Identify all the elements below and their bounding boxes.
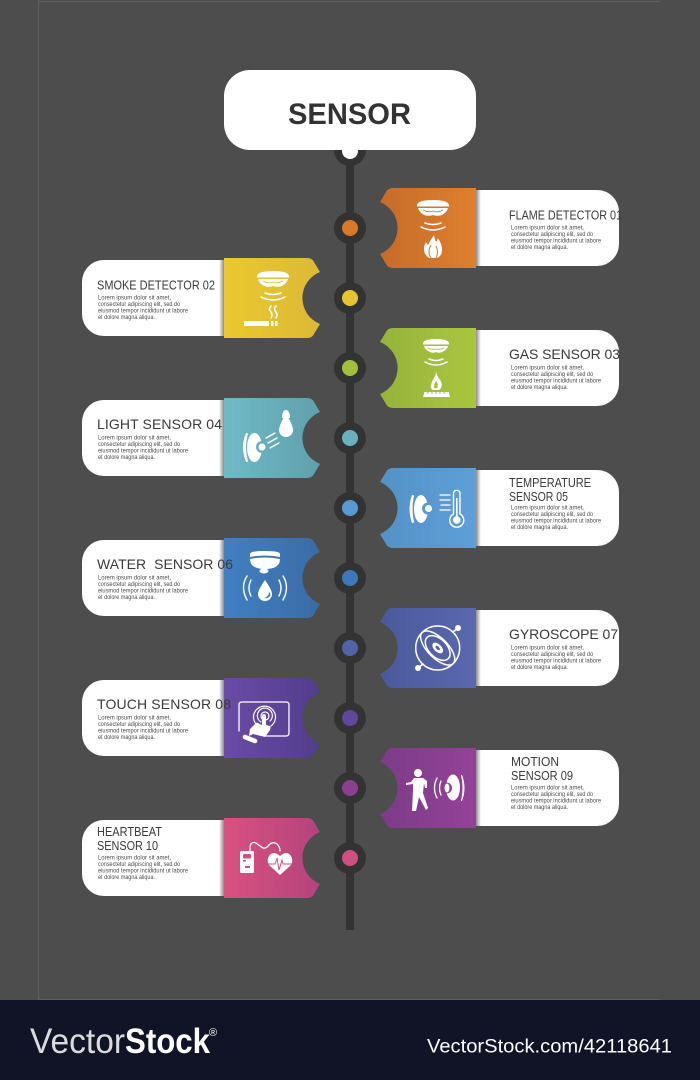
timeline spine [346,150,354,930]
text: light sensor description: eiusmod tempor incididunt ut labore [98,448,188,454]
footer logo [30,1022,217,1061]
text: motion sensor description: eiusmod tempor incididunt ut labore [511,798,601,804]
icon: motion sensor [406,769,464,811]
text: gyroscope description: et dolore magna aliqua. [511,664,568,671]
heading: motion sensor second line: SENSOR 09 [511,769,573,783]
text: gas sensor description: Lorem ipsum dolor sit amet, [511,364,584,372]
title box [224,70,476,159]
text: water sensor description: eiusmod tempor incididunt ut labore [98,588,188,594]
panel: smoke detector 02 [82,258,320,338]
text: water sensor description: Lorem ipsum dolor sit amet, [98,574,171,582]
icon: water sensor [244,551,286,601]
text: temperature sensor description: eiusmod tempor incididunt ut labore [511,518,601,524]
heading: heartbeat sensor 10: HEARTBEAT [97,825,162,839]
heading: heartbeat sensor second line: SENSOR 10 [97,839,158,853]
panel: motion sensor 09 [380,748,619,828]
icon: gas sensor [423,339,450,397]
text: water sensor description [98,574,188,601]
text: touch sensor description: eiusmod tempor incididunt ut labore [98,728,188,734]
text: gas sensor description [511,364,601,391]
icon: heartbeat sensor [240,842,292,875]
text: smoke detector description: consectetur adipiscing elit, sed do [98,301,180,308]
text: smoke detector description: Lorem ipsum dolor sit amet, [98,294,171,302]
heading: water sensor 06: WATER SENSOR 06 [97,556,233,572]
text: gas sensor description: eiusmod tempor incididunt ut labore [511,378,601,384]
heading: gas sensor 03: GAS SENSOR 03 [509,346,620,362]
text: temperature sensor description: Lorem ipsum dolor sit amet, [511,504,584,512]
heading: touch sensor 08: TOUCH SENSOR 08 [97,696,231,712]
footer logo: Stock [125,1022,210,1061]
text: flame detector description: eiusmod tempor incididunt ut labore [511,238,601,244]
heading: light sensor 04: LIGHT SENSOR 04 [97,416,222,432]
panel: temperature sensor 05 [380,468,619,548]
text: light sensor description: Lorem ipsum dolor sit amet, [98,434,171,442]
text: gas sensor description: consectetur adipiscing elit, sed do [511,371,593,378]
panel: light sensor 04 [82,398,320,478]
panel: touch sensor 08 [82,678,320,758]
icon: touch sensor [239,702,289,741]
text: temperature sensor description [511,504,601,531]
text: motion sensor description [511,784,601,811]
text: touch sensor description [98,714,188,741]
text: light sensor description: et dolore magna aliqua. [98,454,155,461]
panel: flame detector 01 [380,188,622,268]
timeline nodes [334,212,366,874]
text: flame detector description: Lorem ipsum dolor sit amet, [511,224,584,232]
text: gyroscope description: Lorem ipsum dolor sit amet, [511,644,584,652]
text: temperature sensor description: consectetur adipiscing elit, sed do [511,511,593,518]
text: smoke detector description: eiusmod tempor incididunt ut labore [98,308,188,314]
icon: temperature sensor [410,490,464,527]
text: water sensor description: consectetur adipiscing elit, sed do [98,581,180,588]
panel: gas sensor 03 [380,328,620,408]
heading: flame detector 01: FLAME DETECTOR 01 [509,208,622,222]
text: heartbeat sensor description: Lorem ipsum dolor sit amet, [98,854,171,862]
footer logo: Vector [30,1022,125,1061]
text: gyroscope description [511,644,601,671]
icon: gyroscope [415,625,461,671]
text: gas sensor description: et dolore magna aliqua. [511,384,568,391]
icon: flame detector [417,200,449,258]
heading: motion sensor 09: MOTION [511,755,559,769]
text: heartbeat sensor description: et dolore magna aliqua. [98,874,155,881]
text: smoke detector description [98,294,188,321]
text: motion sensor description: Lorem ipsum dolor sit amet, [511,784,584,792]
text: water sensor description: et dolore magna aliqua. [98,594,155,601]
panel: heartbeat sensor 10 [82,818,320,898]
icon: light sensor [243,410,293,462]
text: motion sensor description: consectetur adipiscing elit, sed do [511,791,593,798]
text: flame detector description: consectetur adipiscing elit, sed do [511,231,593,238]
title: SENSOR [288,98,411,131]
icon: smoke detector [244,271,289,326]
text: gyroscope description: eiusmod tempor incididunt ut labore [511,658,601,664]
text: touch sensor description: consectetur adipiscing elit, sed do [98,721,180,728]
text: heartbeat sensor description: eiusmod tempor incididunt ut labore [98,868,188,874]
text: motion sensor description: et dolore magna aliqua. [511,804,568,811]
text: temperature sensor description: et dolore magna aliqua. [511,524,568,531]
heading: gyroscope 07: GYROSCOPE 07 [509,626,618,642]
panel: gyroscope 07 [380,608,619,688]
timeline top node [334,134,366,166]
text: flame detector description: et dolore magna aliqua. [511,244,568,251]
footer logo: ® [209,1027,217,1039]
text: touch sensor description: Lorem ipsum dolor sit amet, [98,714,171,722]
text: touch sensor description: et dolore magna aliqua. [98,734,155,741]
text: light sensor description: consectetur adipiscing elit, sed do [98,441,180,448]
footer id: VectorStock.com/42118641 [427,1036,672,1058]
footer band [0,1000,700,1080]
heading: smoke detector 02: SMOKE DETECTOR 02 [97,278,215,292]
text: light sensor description [98,434,188,461]
text: smoke detector description: et dolore magna aliqua. [98,314,155,321]
heading: temperature sensor 05: TEMPERATURE [509,476,591,490]
text: flame detector description [511,224,601,251]
text: gyroscope description: consectetur adipiscing elit, sed do [511,651,593,658]
text: heartbeat sensor description [98,854,188,881]
text: heartbeat sensor description: consectetur adipiscing elit, sed do [98,861,180,868]
panel: water sensor 06 [82,538,320,618]
heading: temperature sensor second line: SENSOR 05 [509,490,568,504]
